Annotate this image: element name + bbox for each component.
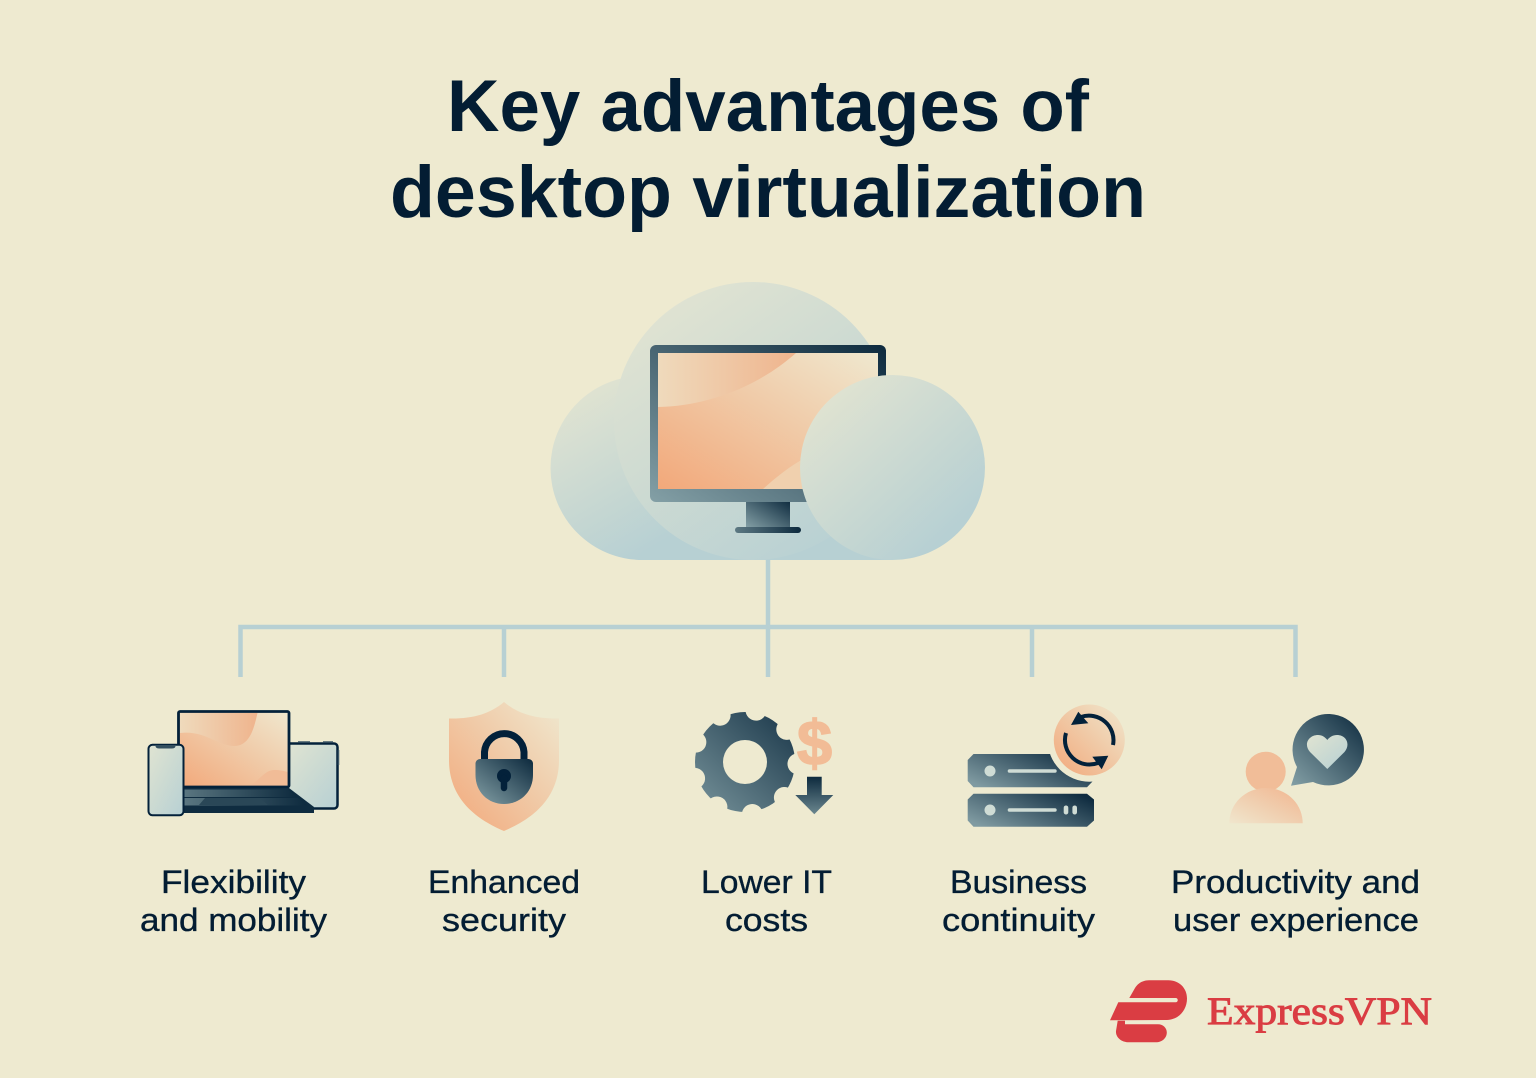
- label: business continuity: Business: [950, 864, 1087, 900]
- dollar sign: $: [797, 709, 832, 779]
- tablet: [286, 742, 338, 808]
- connector tree: [240, 560, 1296, 677]
- icon: gear, dollar and down arrow: [695, 712, 834, 814]
- speech bubble: [1291, 714, 1364, 786]
- sync badge: [1054, 704, 1125, 776]
- down arrow: [795, 777, 833, 814]
- label: enhanced security: security: [442, 902, 566, 938]
- icon: shield with padlock: [449, 702, 559, 831]
- wordmark: ExpressVPN: [1207, 990, 1432, 1033]
- icon: laptop, tablet and phone: [148, 712, 338, 815]
- title: [390, 66, 1146, 233]
- label: enhanced security: [428, 864, 580, 938]
- title: Key advantages of: [447, 66, 1090, 147]
- label: flexibility: [140, 864, 327, 938]
- icon: cloud with desktop monitor: [550, 282, 985, 560]
- server upper: [968, 754, 1093, 787]
- padlock: [476, 734, 533, 804]
- phone: [148, 745, 184, 815]
- title: desktop virtualization: [390, 152, 1146, 233]
- label: enhanced security: Enhanced: [428, 864, 580, 900]
- cloud front: [800, 375, 985, 560]
- cloud back: [550, 282, 893, 560]
- person: [1229, 752, 1303, 823]
- heart: [1307, 735, 1347, 769]
- label: flexibility: Flexibility: [161, 864, 306, 900]
- gear: [695, 712, 794, 812]
- laptop: [178, 712, 314, 813]
- logo: ExpressVPN: [1110, 980, 1432, 1042]
- logo mark: [1110, 980, 1187, 1042]
- label: productivity and user experience: [1171, 864, 1420, 938]
- label: flexibility: and mobility: [140, 902, 327, 938]
- icon: servers with sync badge: [968, 698, 1131, 827]
- label: productivity and user experience: user experience: [1173, 902, 1419, 938]
- server lower: [968, 794, 1094, 827]
- label: business continuity: continuity: [942, 902, 1095, 938]
- label: lower it costs: [701, 864, 832, 938]
- label: lower it costs: costs: [725, 902, 808, 938]
- label: business continuity: [942, 864, 1095, 938]
- icon: person with heart speech bubble: [1229, 714, 1364, 823]
- shield: [449, 702, 559, 831]
- label: lower it costs: Lower IT: [701, 864, 832, 900]
- label: productivity and user experience: Productivity and: [1171, 864, 1420, 900]
- badge gap: [1048, 698, 1131, 782]
- monitor: [650, 345, 886, 533]
